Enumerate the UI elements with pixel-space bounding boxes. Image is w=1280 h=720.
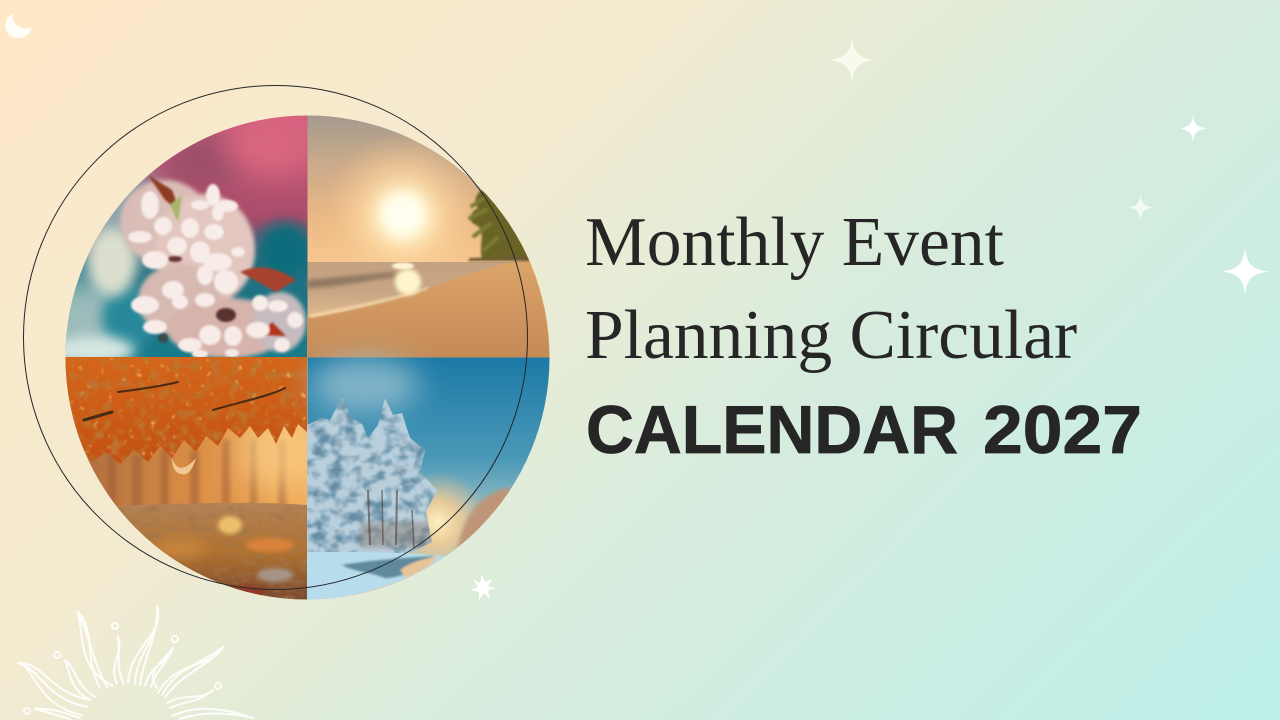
decorative thin ring [24, 86, 528, 590]
icon: large sparkle top [828, 38, 875, 83]
icon: sparkle near circle [470, 574, 496, 600]
title line 2: Planning Circular [585, 297, 1077, 374]
icon: faint sparkle right [1128, 194, 1153, 221]
snow covered trees [307, 398, 437, 553]
frozen lake [307, 552, 446, 602]
blossom mass [120, 180, 306, 358]
title [585, 204, 1142, 468]
icon: sun outline bottom left [18, 606, 253, 719]
distant trees [455, 486, 512, 549]
icon: sparkle upper right [1180, 115, 1207, 142]
icon: large sparkle right [1222, 248, 1269, 295]
autumn leaf canopy [65, 357, 307, 467]
panel: spring blossom quadrant [66, 116, 308, 357]
panel: autumn forest quadrant [65, 357, 322, 600]
title line 3: 2027 [983, 392, 1142, 468]
palm trees [466, 189, 530, 262]
autumn ground [116, 502, 307, 600]
seasonal photo circle [35, 115, 550, 602]
panel: winter forest quadrant [307, 357, 550, 602]
title line 3: CALENDAR [586, 392, 958, 468]
panel: summer beach quadrant [307, 115, 550, 360]
title line 1: Monthly Event [585, 204, 1004, 281]
icon: crescent moon [5, 13, 32, 38]
